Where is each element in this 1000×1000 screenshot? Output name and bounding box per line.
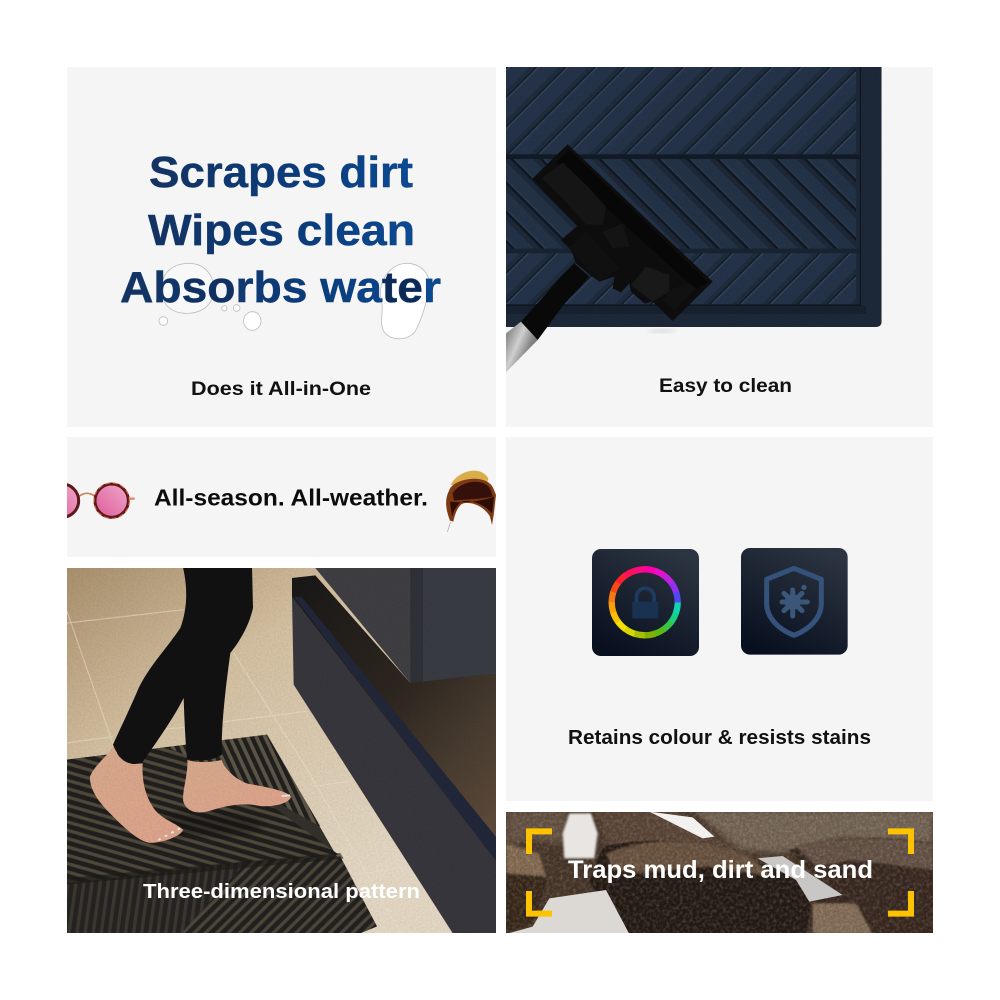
icon: fur trapper hat [446,471,496,532]
blue-grey edge [294,596,497,863]
panel: colour and stain resistance [506,437,933,801]
focus brackets [526,828,914,917]
icon: colour lock [592,549,699,656]
blurred carpet background [693,810,933,853]
white sand [506,812,843,934]
heading: three benefits: Scrapes dirt [149,148,413,197]
brown counter and dark countertop strip [292,575,497,865]
heading: three benefits: Wipes clean [148,206,415,255]
caption: traps mud, dirt and sand: Traps mud, dirt and sand [568,856,873,884]
water droplets [159,263,429,339]
heading: three benefits: Absorbs water [120,263,441,312]
caption: three-dimensional pattern: Three-dimensional pattern [143,881,420,903]
heading: three benefits [120,148,441,312]
shadow under feet [137,813,264,836]
caption: easy to clean: Easy to clean [659,375,792,397]
floor shadow [648,329,676,333]
floor tile joints [67,609,350,838]
panel: kitchen photo, three-dimensional pattern [67,567,497,935]
carpet mounds [589,841,811,934]
vacuum cleaner head and tube [506,144,713,372]
cabinet front panel [292,596,497,935]
icon: stain shield [741,548,848,655]
panel: all-season [45,437,496,557]
leggings [113,567,253,764]
doormat on floor [67,735,377,935]
icon: pink sunglasses [67,482,135,519]
panel: traps mud, dirt and sand [506,810,933,934]
caption: all-in-one: Does it All-in-One [191,378,371,400]
caption: retains colour and resists stains: Retains colour & resists stains [568,727,871,749]
panel: scrapes, wipes, absorbs [67,67,496,427]
doormat close-up [506,67,882,327]
caption: all-season all-weather: All-season. All-weather. [154,484,428,510]
cabinet upper box [315,568,497,683]
panel: easy to clean [506,67,933,427]
feet [90,747,291,843]
